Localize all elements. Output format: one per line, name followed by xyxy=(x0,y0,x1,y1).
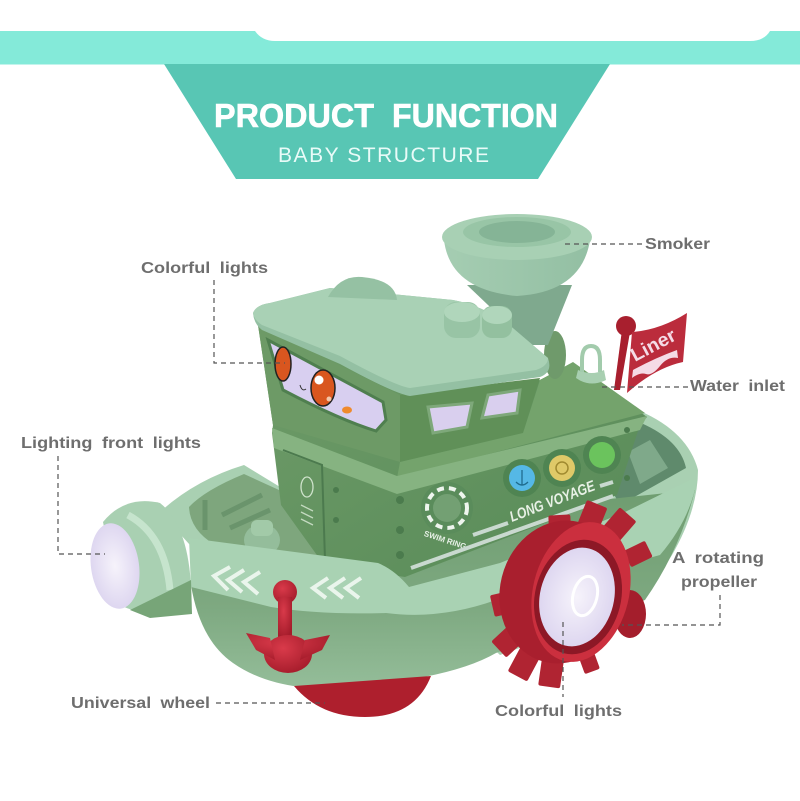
porthole green xyxy=(583,436,621,474)
flag xyxy=(614,313,687,393)
hull stripes xyxy=(411,482,613,568)
roof studs xyxy=(444,302,512,338)
callout: smoker: Smoker xyxy=(645,236,710,253)
anchor xyxy=(246,580,330,673)
eye right xyxy=(311,370,335,406)
hull body xyxy=(191,490,695,687)
callout: colorful lights bottom: Colorful lights xyxy=(495,703,622,720)
face window xyxy=(268,340,386,431)
heading: product function: FUNCTION xyxy=(392,97,558,134)
hull rim front xyxy=(189,480,697,615)
long voyage lettering: LONG VOYAGE xyxy=(507,477,598,526)
left deck well xyxy=(160,465,340,575)
tube xyxy=(544,331,566,379)
side window 1 xyxy=(428,403,472,433)
universal wheel xyxy=(294,676,431,717)
heading: product function xyxy=(214,97,558,134)
side window 2 xyxy=(482,390,520,418)
callout: universal wheel: Universal wheel xyxy=(71,695,210,712)
subheading: baby structure: BABY STRUCTURE xyxy=(278,144,489,167)
water inlet cap xyxy=(576,346,606,384)
heading: product function: PRODUCT xyxy=(214,97,374,134)
callout: rotating propeller: A rotating xyxy=(672,550,764,567)
cabin rail xyxy=(272,416,647,494)
title panel xyxy=(164,64,610,179)
far hull rim xyxy=(400,411,698,655)
paddle wheel propeller xyxy=(484,500,653,688)
callout: lighting front lights xyxy=(21,435,201,554)
upper cabin shading xyxy=(400,378,540,462)
chevrons front xyxy=(214,567,361,598)
top banner band xyxy=(0,31,800,64)
cabin lower body xyxy=(258,325,647,577)
flag text: Liner xyxy=(627,325,680,366)
callout: rotating propeller xyxy=(622,550,764,625)
callout: colorful lights top xyxy=(141,260,285,363)
engine deck top xyxy=(397,362,645,478)
smoker funnel xyxy=(442,214,592,345)
callout: lighting front lights: Lighting front lights xyxy=(21,435,201,452)
headlight xyxy=(85,501,192,618)
porthole yellow xyxy=(543,449,581,487)
callout: colorful lights top: Colorful lights xyxy=(141,260,268,277)
roof xyxy=(253,277,549,396)
callout: colorful lights bottom xyxy=(495,622,622,720)
callout: water inlet: Water inlet xyxy=(690,378,786,395)
callout: rotating propeller: propeller xyxy=(681,574,757,591)
life ring xyxy=(421,482,473,551)
eye left xyxy=(275,347,291,381)
toy boat illustration xyxy=(85,214,698,717)
life ring: SWIM RING xyxy=(423,529,467,551)
porthole blue xyxy=(503,459,541,497)
